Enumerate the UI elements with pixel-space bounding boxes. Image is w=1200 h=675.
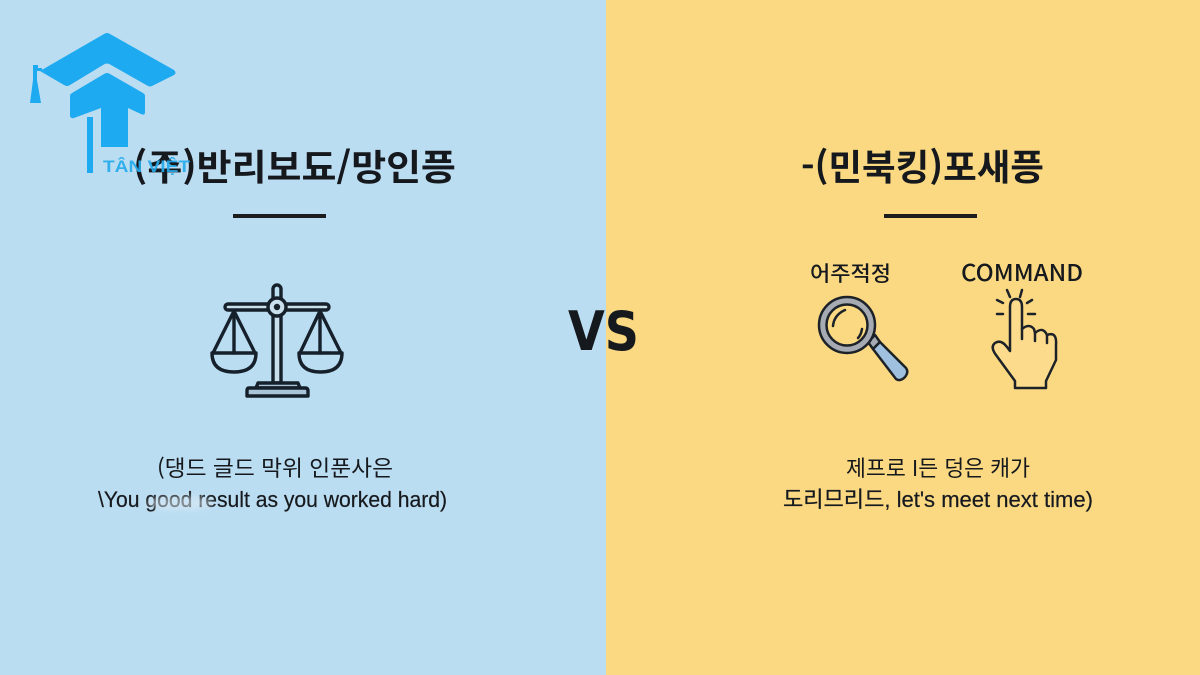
logo wordmark: TÂN VIỆT — [103, 157, 191, 176]
left heading: (주)반리보됴/망인픙 — [133, 139, 456, 191]
logo tassel — [30, 65, 42, 103]
logo arrow — [70, 73, 145, 147]
label: left icon title: 어주적정 — [810, 258, 891, 288]
icon: magnifying glass — [819, 297, 907, 380]
left caption line 2: \You good result as you worked hard) — [98, 487, 447, 512]
left heading underline — [233, 214, 326, 218]
right heading underline — [884, 214, 977, 218]
smudge over caption — [146, 496, 214, 510]
right heading: -(민북킹)포새픙 — [801, 139, 1044, 191]
right caption line 1: 제프로 I든 덩은 캐가 — [846, 451, 1030, 483]
panel: right yellow background — [606, 0, 1200, 675]
VS label: VS — [568, 300, 639, 363]
panel: left blue background — [0, 0, 606, 675]
logo bar — [87, 117, 93, 173]
left caption line 1: (댕드 글드 막위 인푼사은 — [157, 451, 393, 483]
label: COMMAND: COMMAND — [961, 254, 1083, 288]
logo cap top — [40, 33, 176, 86]
right caption line 2: 도리므리드, let's meet next time) — [783, 487, 1093, 512]
logo: Tan Viet graduation cap — [30, 33, 191, 176]
icon: balance scales — [212, 285, 342, 396]
icon: pointing hand — [993, 290, 1056, 388]
